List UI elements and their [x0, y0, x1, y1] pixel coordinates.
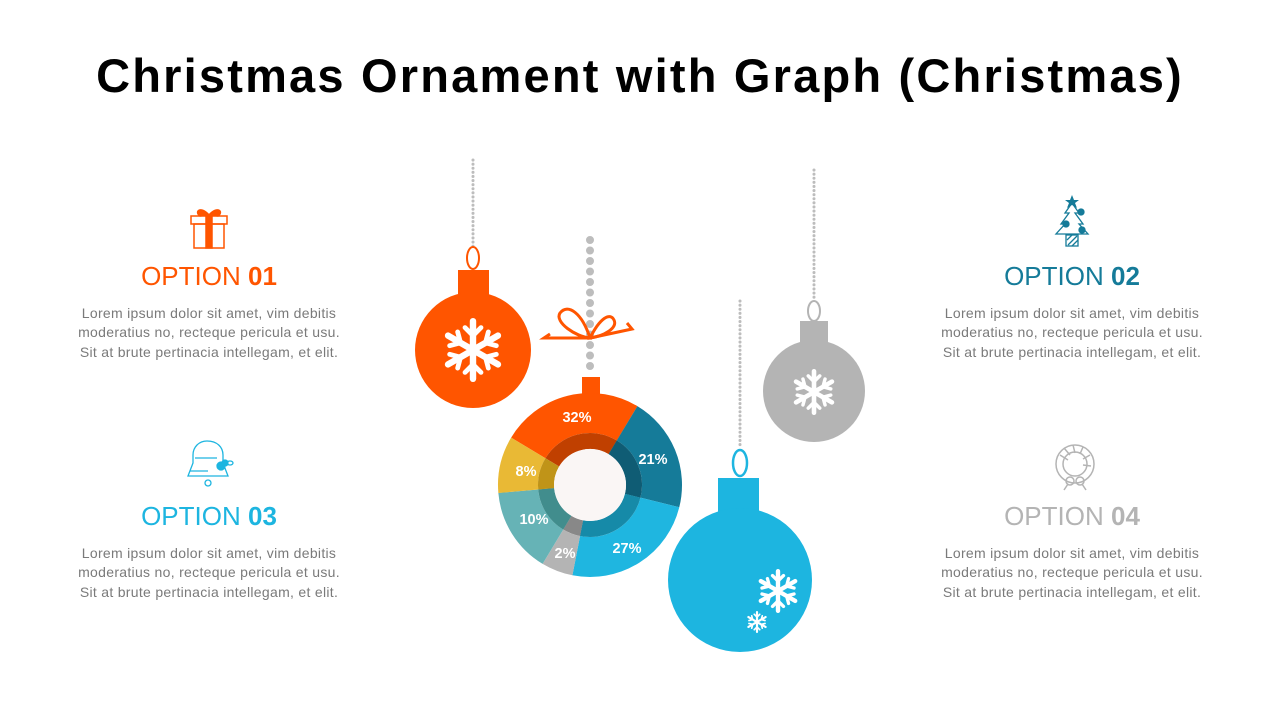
- text: option 02: [941, 305, 1203, 360]
- labels: donut percentages: 2%: [555, 546, 576, 562]
- panel: option 01: [78, 261, 340, 360]
- labels: donut percentages: 32%: [562, 410, 592, 426]
- text: option 03: Sit at brute pertinacia intellegam, et elit.: [80, 584, 338, 600]
- labels: donut percentages: 10%: [519, 512, 549, 528]
- labels: donut percentages: 21%: [638, 452, 668, 468]
- heading: option 04: OPTION 04: [1004, 501, 1140, 531]
- heading: option 02: OPTION 02: [1004, 261, 1140, 291]
- icon: ribbon bow: [544, 309, 632, 338]
- icon: tree: [1056, 195, 1088, 246]
- text: option 01: Sit at brute pertinacia intellegam, et elit.: [80, 344, 338, 360]
- heading: option 01: OPTION 01: [141, 261, 277, 291]
- text: option 03: moderatius no, recteque pericula et usu.: [78, 564, 340, 580]
- panel: option 03: [78, 501, 340, 600]
- ornament: orange: [415, 160, 531, 408]
- text: option 01: Lorem ipsum dolor sit amet, vim debitis: [82, 305, 336, 321]
- labels: donut percentages: 8%: [516, 464, 537, 480]
- ornament: grey: [763, 170, 865, 442]
- text: option 02: Lorem ipsum dolor sit amet, vim debitis: [945, 305, 1199, 321]
- text: option 04: [941, 545, 1203, 600]
- text: option 03: Lorem ipsum dolor sit amet, vim debitis: [82, 545, 336, 561]
- title: Christmas Ornament with Graph (Christmas): [96, 49, 1184, 102]
- text: option 04: Lorem ipsum dolor sit amet, vim debitis: [945, 545, 1199, 561]
- panel: option 04: [941, 501, 1203, 600]
- text: option 04: Sit at brute pertinacia intellegam, et elit.: [943, 584, 1201, 600]
- text: option 03: [78, 545, 340, 600]
- text: option 02: Sit at brute pertinacia intellegam, et elit.: [943, 344, 1201, 360]
- ornament: blue: [668, 301, 812, 652]
- text: option 01: [78, 305, 340, 360]
- icon: gift: [191, 210, 227, 248]
- labels: donut percentages: [516, 410, 668, 562]
- text: option 02: moderatius no, recteque pericula et usu.: [941, 324, 1203, 340]
- text: option 04: moderatius no, recteque pericula et usu.: [941, 564, 1203, 580]
- text: option 01: moderatius no, recteque pericula et usu.: [78, 324, 340, 340]
- heading: option 03: OPTION 03: [141, 501, 277, 531]
- icon: wreath: [1056, 445, 1094, 490]
- icon: bell: [188, 441, 233, 486]
- panel: option 02: [941, 261, 1203, 360]
- labels: donut percentages: 27%: [612, 541, 642, 557]
- chart: donut ornament: [491, 240, 689, 584]
